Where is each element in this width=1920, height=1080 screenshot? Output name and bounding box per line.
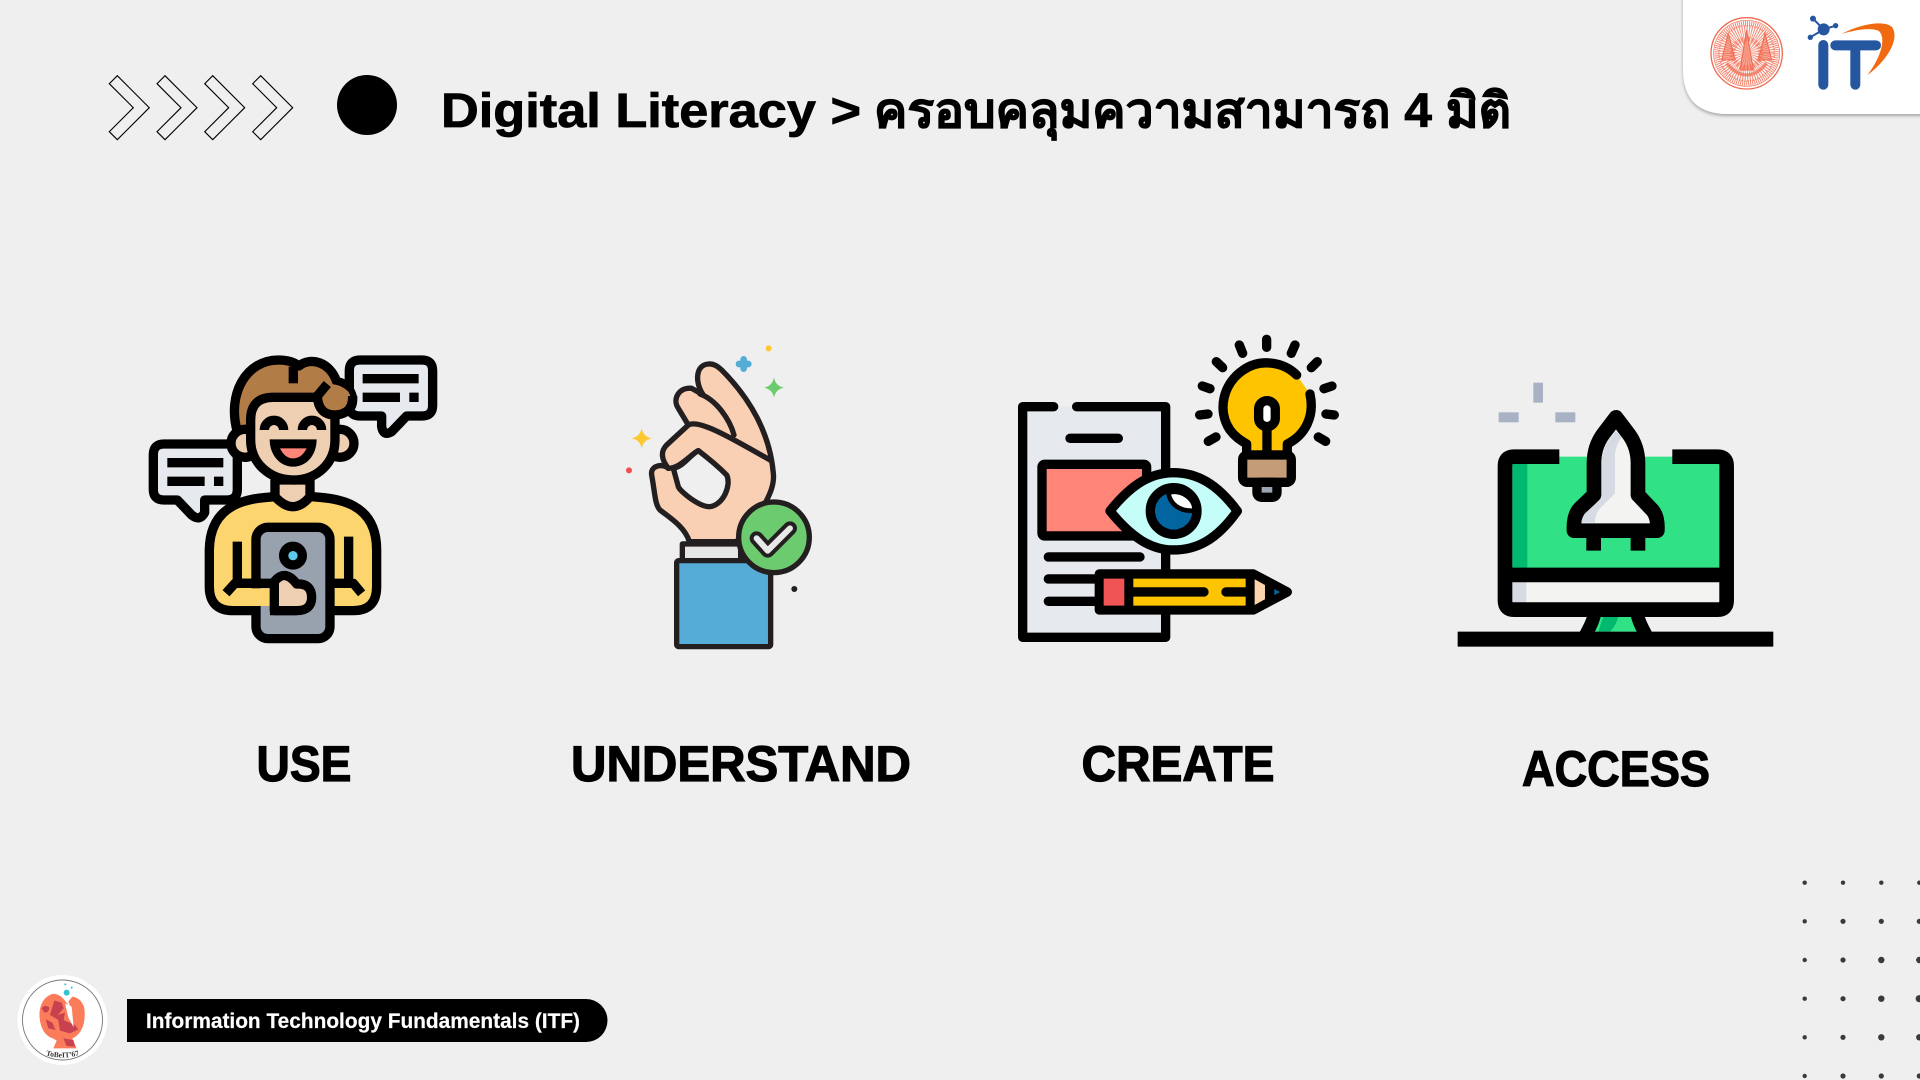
brain graphic bbox=[39, 983, 85, 1048]
icon: understand - OK hand bbox=[626, 345, 809, 647]
icon: create - document, eye, pencil, bulb bbox=[1023, 339, 1334, 637]
title bbox=[441, 85, 1511, 141]
sparkles bbox=[626, 345, 797, 592]
document bbox=[1023, 407, 1166, 637]
phone bbox=[235, 527, 330, 639]
sleeve bbox=[677, 561, 771, 647]
check badge bbox=[739, 502, 809, 573]
icon: black circle bbox=[337, 75, 397, 135]
rocket bbox=[1574, 417, 1657, 551]
footer pill with course name: Information Technology Fundamentals (ITF) bbox=[146, 1010, 580, 1033]
rocket shade bbox=[1581, 431, 1622, 523]
icon: row of chevrons bbox=[109, 76, 293, 140]
ring hole bbox=[673, 451, 728, 507]
shirt cuff bbox=[682, 544, 741, 561]
person head bbox=[231, 367, 354, 480]
eye bbox=[1110, 473, 1237, 550]
title: ครอบคลุมความสามารถ 4 มิติ bbox=[874, 85, 1511, 141]
sparks bbox=[1499, 383, 1575, 422]
icon: ToBeIT'67 badge bbox=[18, 975, 108, 1065]
icon: institute seal bbox=[1711, 18, 1782, 89]
label: USE: USE bbox=[256, 736, 352, 792]
light bulb bbox=[1200, 339, 1334, 497]
label: ACCESS: ACCESS bbox=[1522, 741, 1710, 797]
icon: IT logo bbox=[1808, 16, 1895, 85]
title: Digital Literacy > bbox=[441, 85, 861, 138]
monitor screen bbox=[1458, 457, 1773, 647]
person hair bbox=[234, 360, 353, 432]
panel: logos top right bbox=[1683, 0, 1920, 114]
icon: dot grid bbox=[1802, 880, 1920, 1079]
pencil bbox=[1099, 574, 1287, 610]
footer pill with course name bbox=[127, 999, 608, 1042]
person body bbox=[209, 480, 377, 611]
icon: access - rocket on monitor bbox=[1458, 383, 1773, 647]
icon: right speech bubble bbox=[349, 360, 433, 433]
label: UNDERSTAND: UNDERSTAND bbox=[571, 736, 911, 792]
icon: use - person with phone bbox=[153, 360, 433, 639]
icon: left speech bubble bbox=[153, 444, 237, 518]
badge label: ToBeIT'67 bbox=[46, 1050, 78, 1058]
label: CREATE: CREATE bbox=[1082, 736, 1274, 792]
